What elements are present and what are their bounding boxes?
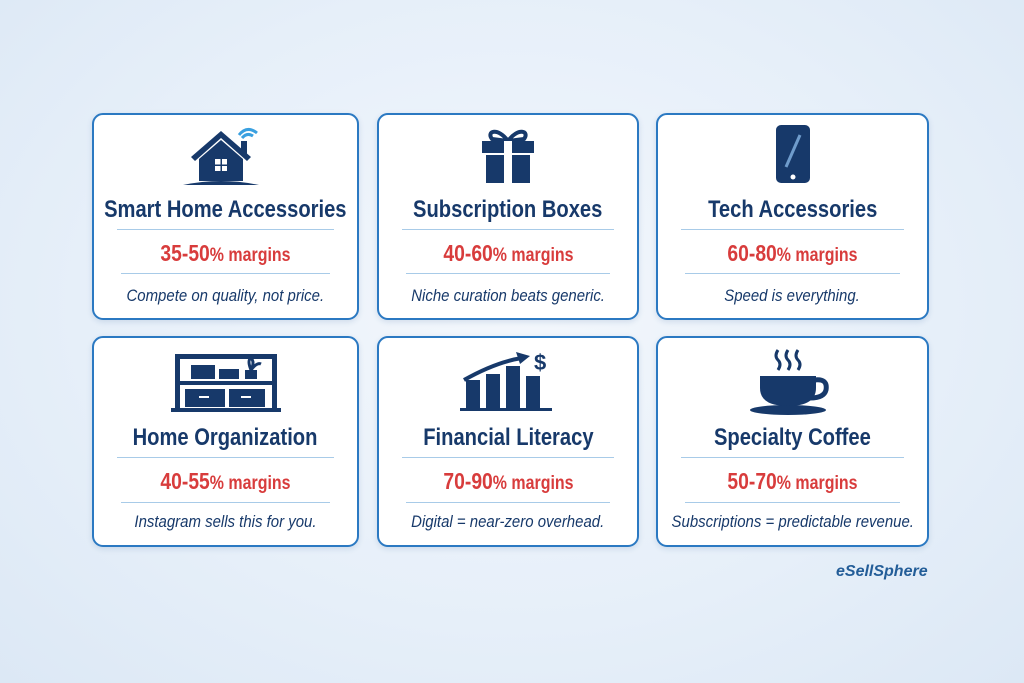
- tagline: Compete on quality, not price.: [127, 286, 324, 305]
- icon: chart: $: [534, 350, 546, 375]
- panel: subscription boxes: [377, 113, 639, 320]
- margin: 40-60% margins: [443, 240, 573, 266]
- tagline: Subscriptions = predictable revenue.: [671, 512, 914, 531]
- icon: house wifi: [183, 128, 259, 185]
- tagline: Niche curation beats generic.: [411, 286, 605, 305]
- icon: chart: [460, 350, 552, 411]
- panel: tech accessories: [656, 113, 929, 320]
- tagline: Speed is everything.: [725, 286, 860, 305]
- title: Tech Accessories: [708, 196, 877, 223]
- title: Smart Home Accessories: [104, 196, 347, 223]
- margin: 70-90% margins: [443, 468, 573, 494]
- title: Subscription Boxes: [413, 196, 603, 223]
- icon: shelf: [171, 354, 281, 412]
- margin: 35-50% margins: [160, 240, 291, 266]
- margin: 50-70% margins: [727, 468, 858, 494]
- panel: home organization: [92, 336, 359, 547]
- icon: coffee cup: [750, 349, 829, 415]
- tagline: Instagram sells this for you.: [134, 512, 317, 531]
- tagline: Digital = near-zero overhead.: [411, 512, 605, 531]
- title: Financial Literacy: [423, 424, 593, 451]
- panel: specialty coffee: [656, 336, 929, 547]
- title: Specialty Coffee: [714, 424, 871, 451]
- panel: smart home: [92, 113, 359, 320]
- margin: 40-55% margins: [160, 468, 291, 494]
- margin: 60-80% margins: [727, 240, 858, 266]
- panel: financial literacy: [377, 336, 639, 547]
- icon: gift: [482, 130, 534, 183]
- icon: phone: [776, 125, 810, 183]
- brand: eSellSphere: [836, 563, 928, 580]
- title: Home Organization: [133, 424, 318, 451]
